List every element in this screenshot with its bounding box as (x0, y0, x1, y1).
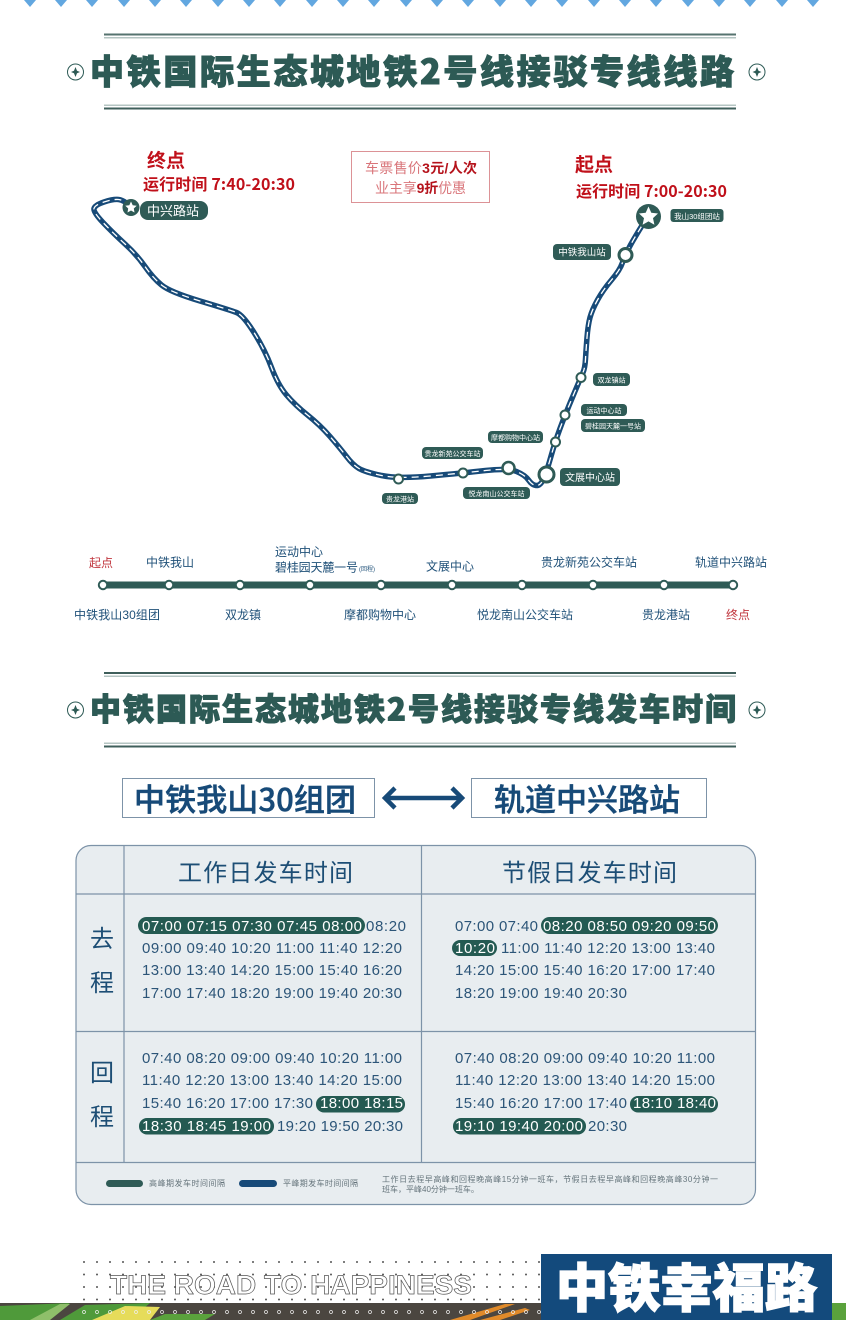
station: 碧桂园天麓一号站 (581, 419, 645, 432)
holiday outbound times: 11:00 11:40 12:20 13:00 13:40 (501, 940, 715, 957)
station: 中铁我山站 (553, 244, 632, 262)
labels below line: 摩都购物中心 (344, 607, 416, 622)
heading: timetable section (68, 672, 765, 748)
holiday return times: 18:10 18:40 (633, 1095, 716, 1112)
holiday outbound times: 10:20 (455, 940, 495, 957)
labels above line: 文展中心 (426, 558, 474, 574)
station: 中兴路站: 中兴路站 (147, 204, 199, 218)
heading: route section (68, 34, 765, 110)
start point label: 运行时间 7:00-20:30 (576, 178, 727, 202)
route direction: destination box: 轨道中兴路站 (494, 775, 680, 820)
weekday return times (139, 1050, 405, 1135)
holiday return times: 15:40 16:20 17:00 17:40 (455, 1095, 627, 1112)
station: 双龙镇站 (576, 373, 630, 386)
station: 中兴路站 (122, 199, 208, 220)
artwork strip (0, 1303, 846, 1320)
labels below line: 贵龙港站 (642, 608, 690, 622)
ticket price callout: 业主享9折优惠 (375, 180, 466, 196)
heading: timetable section: 中铁国际生态城地铁2号线接驳专线发车时间 (90, 684, 736, 730)
labels below line: 中铁我山30组团 (74, 607, 160, 622)
legend: peak: 高峰期发车时间间隔 (149, 1178, 225, 1188)
station: 我山30组团站: 我山30组团站 (674, 211, 720, 221)
station: 文展中心站 (539, 467, 620, 486)
weekday outbound times: 09:00 09:40 10:20 11:00 11:40 12:20 (142, 940, 402, 957)
station: 贵龙港站 (382, 474, 418, 504)
holiday outbound times: 08:20 08:50 09:20 09:50 (543, 918, 716, 935)
timetable note: 班车，平峰40分钟一班车。 (382, 1184, 479, 1194)
footer banner (0, 1247, 846, 1320)
labels above line (89, 544, 767, 574)
station: 贵龙港站: 贵龙港站 (386, 494, 414, 504)
weekday return times: 07:40 08:20 09:00 09:40 10:20 11:00 (142, 1050, 402, 1067)
slogan box: 中铁幸福路 (556, 1247, 817, 1320)
station: 悦龙南山公交车站 (463, 462, 530, 499)
weekday return times: 18:30 18:45 19:00 (142, 1118, 271, 1135)
station: 运动中心站 (560, 404, 627, 420)
end point label: 终点 (147, 146, 185, 173)
linear station diagram (74, 544, 767, 622)
weekday outbound times: 13:00 13:40 14:20 15:00 15:40 16:20 (142, 962, 402, 979)
route line (94, 199, 648, 486)
ticket price callout (352, 152, 490, 202)
icon: double arrow (385, 788, 462, 808)
labels above line: (回程) (359, 565, 375, 573)
weekday return times: 11:40 12:20 13:00 13:40 14:20 15:00 (142, 1072, 402, 1089)
row header: outbound: 程 (90, 970, 114, 997)
legend: off-peak (239, 1178, 358, 1188)
route direction: origin box: 中铁我山30组团 (134, 775, 356, 820)
labels below line: 双龙镇 (225, 608, 261, 622)
station: 文展中心站: 文展中心站 (565, 471, 615, 484)
English slogan: THE ROAD TO HAPPINESS (110, 1270, 472, 1300)
row header: return: 回 (90, 1060, 114, 1087)
weekday return times: 15:40 16:20 17:00 17:30 (142, 1095, 313, 1112)
station: 碧桂园天麓一号站: 碧桂园天麓一号站 (585, 422, 641, 430)
route map (94, 199, 724, 504)
weekday outbound times: 08:20 (366, 918, 406, 935)
row header: return (90, 1060, 114, 1131)
line with station nodes (99, 581, 737, 589)
legend: off-peak: 平峰期发车时间间隔 (283, 1178, 358, 1188)
station: 贵龙新苑公交车站: 贵龙新苑公交车站 (424, 449, 480, 458)
column header: holiday: 节假日发车时间 (502, 860, 677, 887)
weekday outbound times: 07:00 07:15 07:30 07:45 08:00 (142, 918, 362, 935)
labels above line: 中铁我山 (146, 554, 194, 570)
holiday outbound times: 18:20 19:00 19:40 20:30 (455, 985, 627, 1002)
row header: return: 程 (90, 1104, 114, 1131)
labels above line: 轨道中兴路站 (695, 554, 767, 570)
end point label (143, 146, 295, 195)
top diamond border (24, 0, 819, 7)
holiday return times: 20:30 (588, 1118, 627, 1135)
labels above line: 起点 (89, 556, 113, 570)
holiday return times: 07:40 08:20 09:00 09:40 10:20 11:00 (455, 1050, 715, 1067)
ticket price callout: 车票售价3元/人次 (365, 160, 477, 176)
weekday outbound times (138, 917, 406, 1002)
holiday return times (453, 1050, 718, 1135)
station: 中铁我山站: 中铁我山站 (558, 246, 606, 258)
labels above line: 运动中心 (275, 544, 323, 559)
holiday outbound times: 07:00 07:40 (455, 918, 538, 935)
end point label: 运行时间 7:40-20:30 (143, 171, 295, 195)
heading: route section: 中铁国际生态城地铁2号线接驳专线线路 (90, 45, 734, 94)
legend: peak (106, 1178, 225, 1188)
weekday return times: 18:00 18:15 (320, 1095, 403, 1112)
holiday return times: 19:10 19:40 20:00 (455, 1118, 583, 1135)
station: 摩都购物中心站: 摩都购物中心站 (491, 433, 540, 442)
row header: outbound (90, 926, 114, 997)
weekday outbound times: 17:00 17:40 18:20 19:00 19:40 20:30 (142, 985, 402, 1002)
row header: outbound: 去 (90, 926, 114, 953)
station: 悦龙南山公交车站: 悦龙南山公交车站 (468, 489, 524, 498)
start point label (575, 150, 727, 202)
timetable panel (76, 846, 756, 1204)
timetable note: 工作日去程早高峰和回程晚高峰15分钟一班车，节假日去程早高峰和回程晚高峰30分钟一 (382, 1174, 718, 1184)
start point label: 起点 (575, 150, 613, 177)
holiday return times: 11:40 12:20 13:00 13:40 14:20 15:00 (455, 1072, 715, 1089)
station: 运动中心站: 运动中心站 (586, 406, 622, 415)
labels below line: 悦龙南山公交车站 (477, 607, 573, 622)
labels below line (74, 607, 750, 622)
labels above line: 贵龙新苑公交车站 (541, 554, 637, 570)
holiday outbound times: 14:20 15:00 15:40 16:20 17:00 17:40 (455, 962, 715, 979)
column header: weekday: 工作日发车时间 (178, 860, 353, 887)
timetable note (382, 1174, 718, 1194)
table frame (76, 846, 756, 1204)
weekday return times: 19:20 19:50 20:30 (277, 1118, 403, 1135)
station: 双龙镇站: 双龙镇站 (598, 376, 626, 384)
station: 我山30组团站 (636, 204, 724, 229)
holiday outbound times (452, 917, 718, 1002)
labels below line: 终点 (726, 607, 750, 622)
station: 贵龙新苑公交车站 (422, 447, 483, 478)
labels above line: 碧桂园天麓一号 (275, 560, 358, 574)
station: 摩都购物中心站 (488, 431, 560, 446)
